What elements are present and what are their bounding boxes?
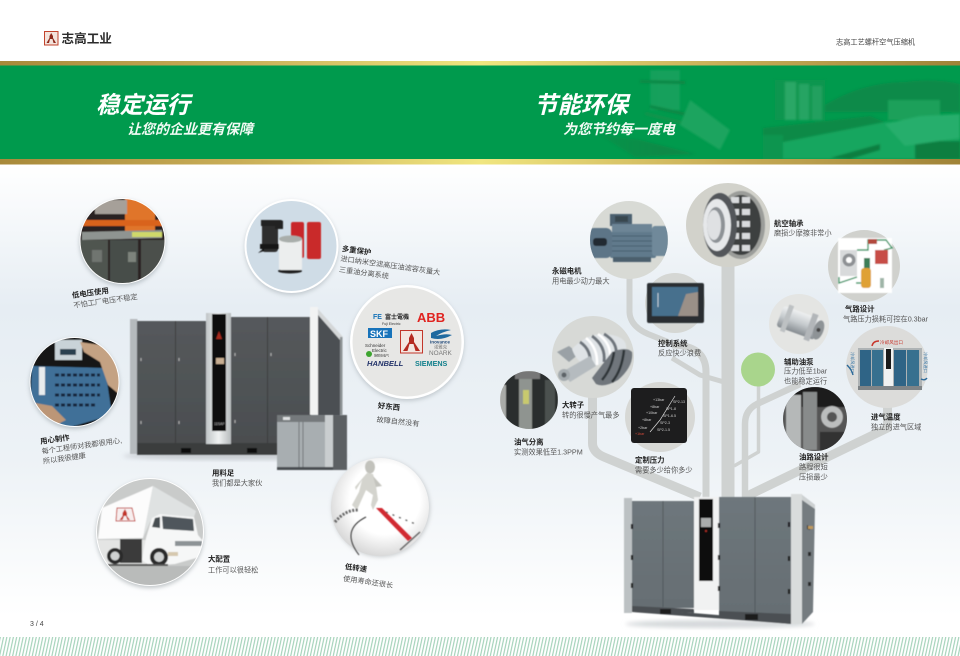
large compressor (right) bbox=[624, 494, 815, 628]
label: low voltage: 不怕工厂电压不稳定 bbox=[73, 292, 138, 310]
label: custom pressure: 定制压力 bbox=[635, 456, 665, 464]
brand: Siemens: SIEMENS bbox=[415, 359, 448, 368]
label: good parts: 故障自然没有 bbox=[376, 415, 420, 428]
label: control system: 控制系统 bbox=[658, 339, 688, 348]
brand: Inovance and Noark: Inovance bbox=[430, 340, 450, 344]
label: oil-gas separation: 实测效果低至1.3PPM bbox=[514, 448, 583, 456]
circle: custom pressure: SP2-13 bbox=[673, 400, 685, 404]
label: low rotation speed: 低转速 bbox=[344, 562, 368, 574]
label: control system: 反应快少浪费 bbox=[658, 348, 701, 358]
label: large rotor bbox=[562, 400, 620, 420]
label: careful manufacture bbox=[40, 426, 124, 466]
pipe tree bbox=[592, 260, 888, 500]
circle: bearing bbox=[686, 183, 770, 267]
label: ample materials: 我们都是大家伙 bbox=[212, 478, 262, 488]
brand: company logo bbox=[400, 330, 422, 353]
brand: Fuji Electric: Fuji Electric bbox=[382, 322, 401, 326]
brand: SKF: SKF bbox=[370, 329, 389, 339]
logo: 志高工业 bbox=[62, 31, 112, 46]
logo bbox=[44, 31, 112, 46]
product line name: 志高工艺螺杆空气压缩机 bbox=[836, 38, 916, 46]
label: low voltage bbox=[71, 282, 138, 310]
circle: intake temperature: 冷却风出口 bbox=[880, 339, 903, 346]
brand: Fuji Electric: 富士電機 bbox=[385, 313, 409, 321]
label: auxiliary oil pump bbox=[784, 358, 828, 386]
circle: low speed runner bbox=[331, 458, 430, 557]
heading: energy saving bbox=[534, 92, 676, 137]
label: careful manufacture: 用心制作 bbox=[40, 433, 71, 446]
brand: Inovance and Noark: NOARK bbox=[429, 350, 452, 357]
label: careful manufacture: 每个工程师对我都很用心, bbox=[41, 436, 123, 456]
label: multiple protection bbox=[338, 244, 442, 288]
circle: custom pressure: SP1-8 bbox=[666, 407, 676, 411]
circle: low voltage breakers bbox=[78, 197, 168, 287]
label: big configuration bbox=[208, 554, 258, 574]
label: permanent magnet motor: 用电最少动力最大 bbox=[552, 276, 610, 286]
circle: custom pressure: SP1-6.5 bbox=[663, 414, 676, 418]
label: low voltage: 低电压使用 bbox=[71, 286, 109, 300]
factory photo in green bbox=[600, 70, 960, 159]
brand: Fuji Electric bbox=[373, 313, 409, 326]
brand: Fuji Electric: FE bbox=[373, 314, 382, 321]
label: careful manufacture: 所以我很健康 bbox=[42, 451, 86, 466]
label: ample materials bbox=[212, 468, 262, 488]
circle: screw rotors bbox=[552, 316, 634, 398]
circle: oil-gas separator bbox=[500, 371, 558, 431]
label: permanent magnet motor: 永磁电机 bbox=[552, 266, 582, 276]
label: intake temperature: 独立的进气区域 bbox=[871, 422, 921, 432]
label: multiple protection: 多重保护 bbox=[341, 244, 372, 257]
label: control system bbox=[658, 339, 701, 358]
label: permanent magnet motor bbox=[552, 266, 610, 286]
heading: energy saving: 节能环保 bbox=[534, 92, 631, 118]
brand: Inovance and Noark: 诺雅克 bbox=[434, 344, 448, 350]
label: good parts: 好东西 bbox=[377, 401, 400, 412]
label: oil-gas separation bbox=[514, 438, 583, 456]
brand: Schneider Electric bbox=[365, 343, 389, 358]
circle: custom pressure: +2bar bbox=[638, 426, 648, 430]
label: aviation bearing: 磨损少摩擦非常小 bbox=[774, 228, 832, 238]
circle: hand-crafted control panel bbox=[30, 337, 120, 430]
heading: stable operation: 让您的企业更有保障 bbox=[127, 121, 255, 137]
circle: air path diagram bbox=[828, 230, 900, 302]
brand: Schneider Electric: Electric bbox=[372, 348, 388, 353]
circle: custom pressure: SP2-3 bbox=[660, 421, 670, 425]
circle: custom pressure: +8bar bbox=[642, 418, 652, 422]
page background bbox=[0, 165, 960, 640]
brand: Schneider Electric: Schneider bbox=[365, 343, 386, 348]
label: oil path design: 路程很短 bbox=[799, 462, 828, 472]
label: aviation bearing bbox=[774, 219, 832, 238]
label: auxiliary oil pump: 压力低至1bar bbox=[784, 366, 828, 376]
label: custom pressure: 需要多少给你多少 bbox=[635, 466, 693, 474]
circle: auxiliary oil pump bbox=[769, 294, 829, 354]
label: intake temperature bbox=[871, 412, 921, 432]
circle: intake temperature: 冷却风进口 bbox=[922, 352, 929, 373]
label: oil-gas separation: 油气分离 bbox=[514, 438, 544, 446]
circle: intake temperature: 冷却风进口 bbox=[849, 352, 856, 373]
heading: energy saving: 为您节约每一度电 bbox=[563, 121, 676, 137]
label: auxiliary oil pump: 也能稳定运行 bbox=[784, 376, 827, 386]
circle: intake temperature bbox=[846, 326, 929, 408]
label: ample materials: 用料足 bbox=[212, 468, 235, 478]
label: intake temperature: 进气温度 bbox=[871, 412, 901, 422]
label: oil path design: 油路设计 bbox=[799, 452, 829, 462]
circle: custom pressure: +13bar bbox=[653, 398, 665, 402]
label: large rotor: 大转子 bbox=[562, 400, 585, 410]
label: custom pressure bbox=[635, 456, 693, 474]
large compressor (left): 11SAF bbox=[214, 422, 226, 426]
circle: filters bbox=[244, 199, 338, 295]
label: low rotation speed: 使用寿命还很长 bbox=[343, 574, 394, 590]
label: aviation bearing: 航空轴承 bbox=[774, 219, 804, 228]
label: multiple protection: 进口纳米空滤高压油滤容灰量大 bbox=[340, 254, 441, 277]
large compressor (left) bbox=[123, 307, 347, 460]
circle: control system bbox=[645, 273, 705, 333]
label: oil path design: 压损最少 bbox=[799, 472, 828, 482]
hatched footer band bbox=[0, 637, 960, 656]
circle: custom pressure: +1bar bbox=[635, 432, 645, 436]
circle: component brands bbox=[350, 285, 464, 401]
brand: Inovance and Noark bbox=[429, 329, 452, 357]
green header band bbox=[0, 61, 960, 164]
circle: custom pressure: +10bar bbox=[646, 411, 658, 415]
brand: Schneider Electric: 施耐德电气 bbox=[374, 352, 389, 358]
heading: stable operation bbox=[96, 92, 255, 137]
brand: ABB: ABB bbox=[417, 310, 445, 325]
label: air path design: 气路压力损耗可控在0.3bar bbox=[843, 314, 929, 324]
page number: 3 / 4 bbox=[30, 621, 44, 628]
heading: stable operation: 稳定运行 bbox=[96, 92, 193, 118]
green node bbox=[741, 352, 775, 386]
circle: motor bbox=[588, 201, 668, 279]
label: good parts bbox=[376, 401, 421, 428]
label: multiple protection: 三重油分离系统 bbox=[338, 265, 389, 281]
label: big configuration: 大配置 bbox=[208, 554, 231, 564]
label: low rotation speed bbox=[343, 562, 395, 590]
circle: custom pressure: SP2-1.5 bbox=[657, 428, 670, 432]
label: auxiliary oil pump: 辅助油泵 bbox=[784, 358, 814, 366]
small compressor bbox=[277, 415, 347, 470]
label: big configuration: 工作可以很轻松 bbox=[208, 566, 258, 574]
circle: oil path design bbox=[783, 387, 847, 452]
label: air path design bbox=[843, 304, 929, 324]
circle: truck bbox=[96, 478, 204, 590]
label: oil path design bbox=[799, 452, 829, 482]
label: large rotor: 转的很慢产气最多 bbox=[562, 410, 620, 420]
circle: custom pressure: +8bar bbox=[650, 405, 660, 409]
label: air path design: 气路设计 bbox=[845, 304, 875, 314]
circle: custom pressure bbox=[625, 382, 695, 452]
brand: Hanbell: HANBELL bbox=[367, 359, 404, 368]
